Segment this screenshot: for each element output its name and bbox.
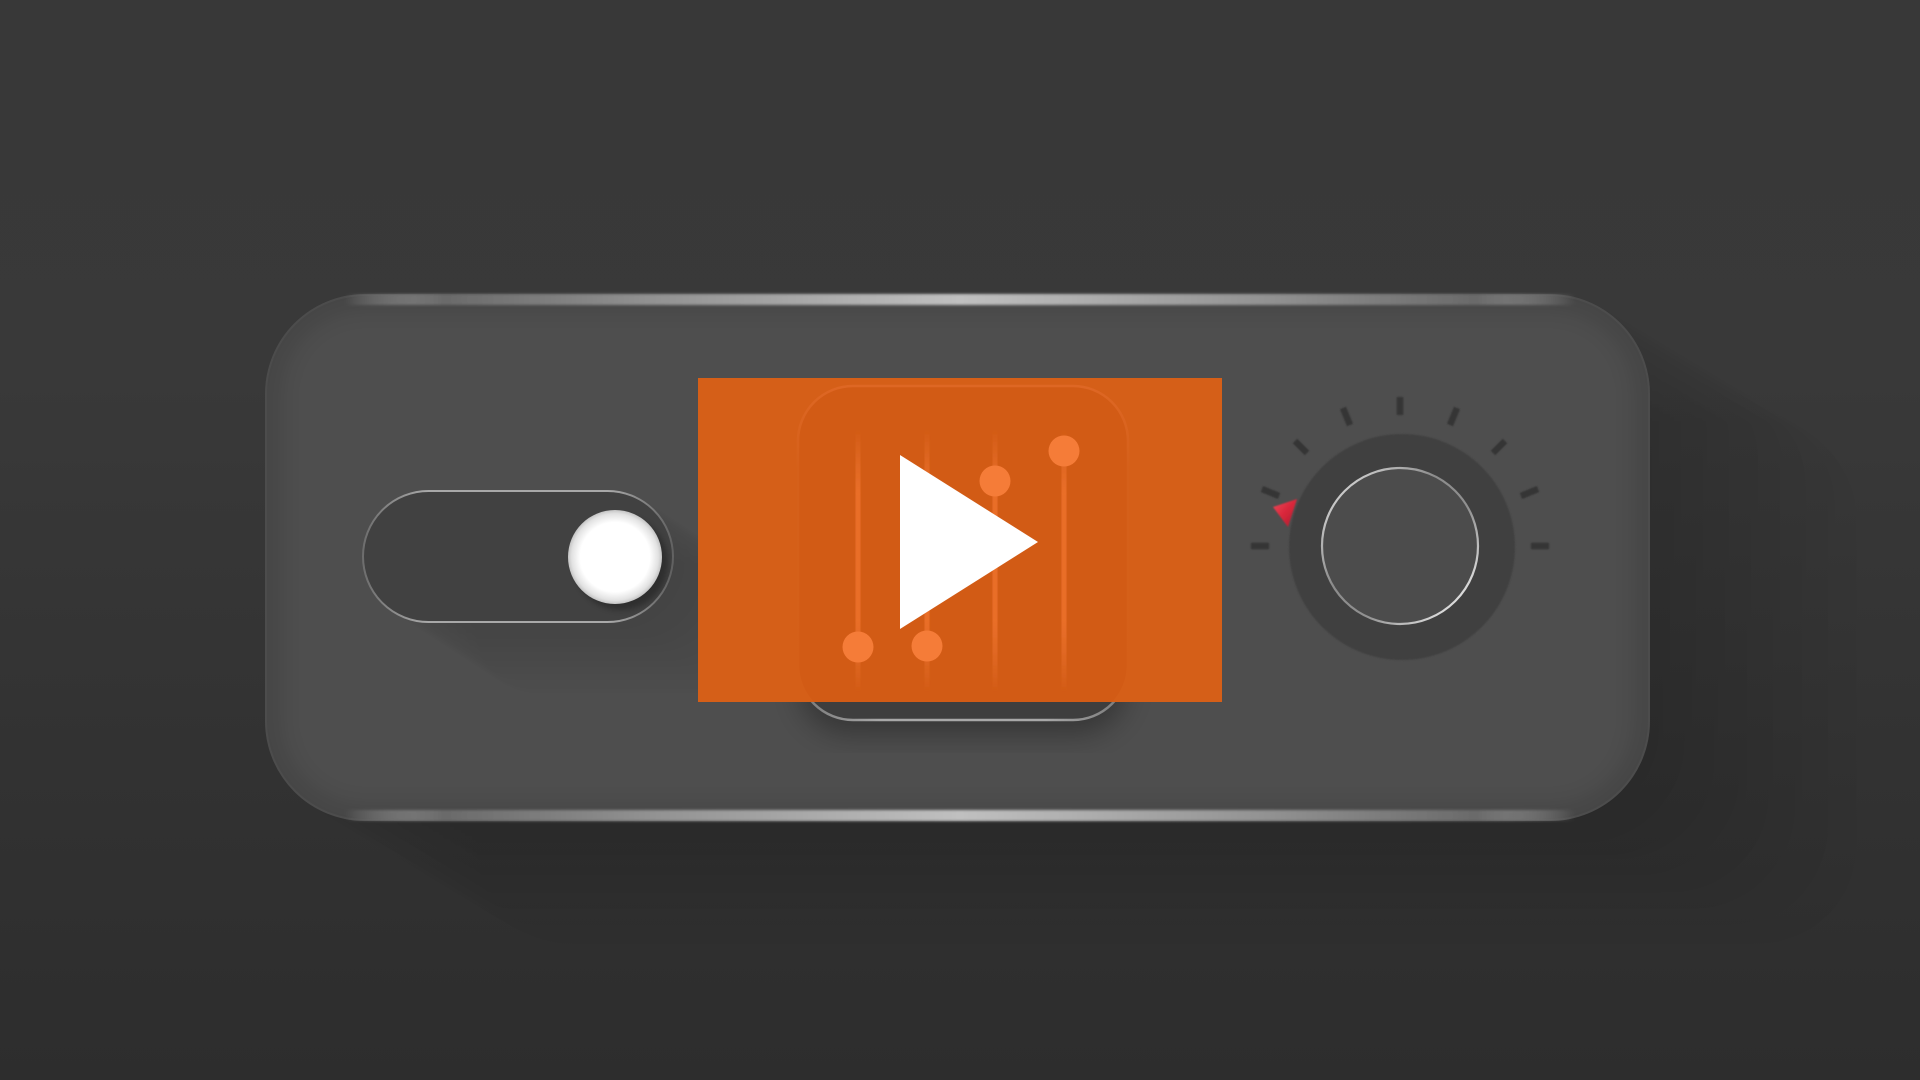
slider 1 [842,450,874,670]
rotary dial [1251,397,1549,660]
toggle knob [568,510,662,604]
sliders box visible rim [798,385,1128,734]
toggle knob shadow [574,516,668,610]
slider 4 [1048,436,1080,670]
sliders box [798,385,1128,720]
toggle long shadow [363,490,783,693]
play button icon [900,455,1038,629]
illustration: control panel video thumbnail [265,292,1682,856]
slider 3 [980,450,1010,670]
dial tick marks [1251,397,1549,546]
panel [265,294,1650,821]
sliders box shadow [800,640,1126,734]
toggle track [363,491,673,622]
slider 2 [912,450,942,670]
sliders box tinted [802,385,1124,418]
orange video overlay [698,378,1222,720]
panel top highlight rim [345,294,1575,305]
dial dark well [1289,434,1515,660]
dial red pointer [1273,499,1297,527]
panel bottom highlight rim [345,810,1575,821]
long shadow of panel [265,294,1859,946]
toggle switch [363,490,783,693]
dial knob [1322,468,1478,624]
